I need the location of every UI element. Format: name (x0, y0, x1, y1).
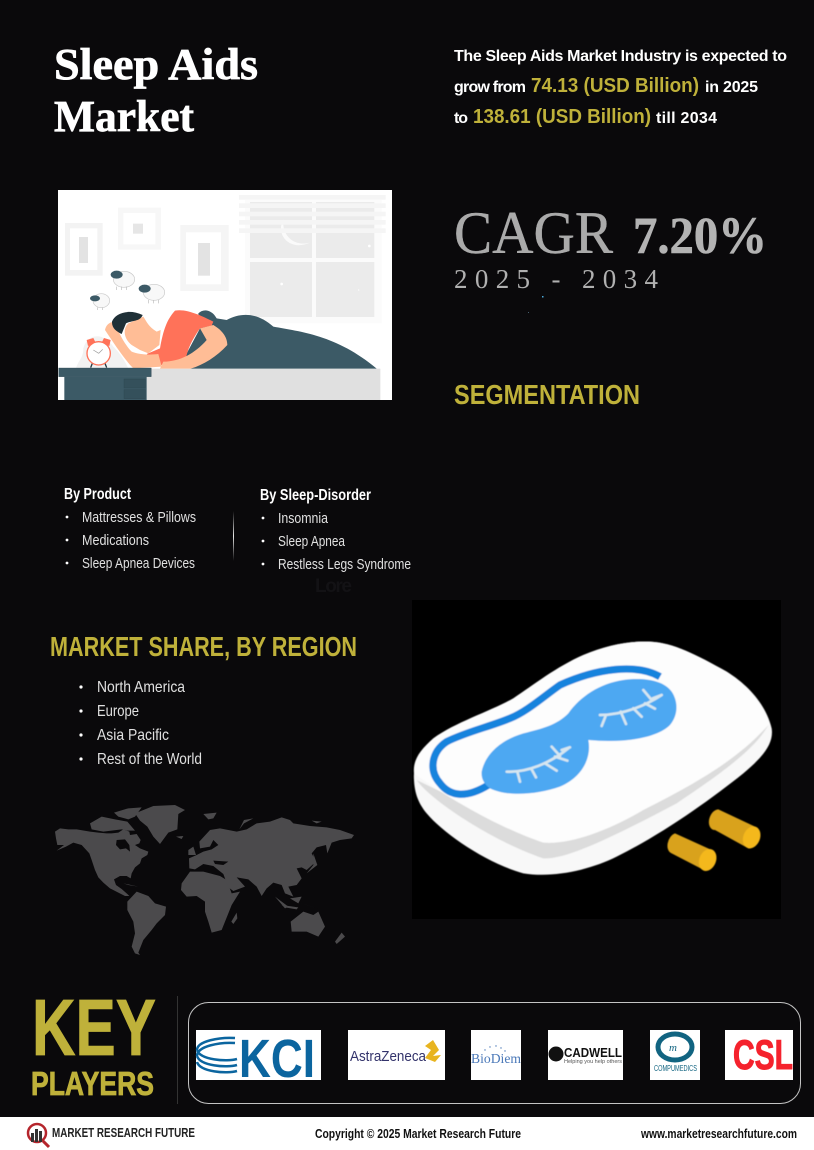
illustration: man sleeping in bed counting sheep (58, 190, 392, 400)
CAGR value: CAGR (454, 200, 613, 266)
key players heading: PLAYERS (31, 1065, 154, 1102)
title (54, 40, 258, 141)
market forecast text: in 2025 (705, 79, 758, 96)
CAGR value (454, 200, 767, 266)
region list (79, 679, 202, 768)
footer logo icon (28, 1124, 49, 1147)
title: Market (54, 92, 194, 141)
segment list: by product: Sleep Apnea Devices (82, 556, 195, 572)
logo: Compumedics: COMPUMEDICS (654, 1064, 697, 1073)
region list: Rest of the World (97, 751, 202, 768)
segmentation heading: SEGMENTATION (454, 379, 640, 410)
market forecast text: 138.61 (USD Billion) (473, 106, 651, 128)
segment list: by product (64, 486, 196, 572)
segment list: by product: By Product (64, 486, 132, 503)
logo: AstraZeneca (348, 1030, 445, 1080)
logo: Cadwell (548, 1030, 623, 1080)
segment list: by sleep disorder: Sleep Apnea (278, 534, 346, 550)
eyelashes (507, 690, 662, 782)
segment list: by sleep disorder: By Sleep-Disorder (260, 487, 371, 504)
segment list: by product: Medications (82, 533, 149, 549)
faint stray text: Lore (315, 576, 352, 597)
region list: Europe (97, 703, 139, 720)
CAGR value: 7.20% (633, 208, 767, 265)
strap (433, 669, 660, 794)
key players panel (188, 1002, 800, 1104)
segment list: by sleep disorder (260, 487, 411, 573)
CAGR period: 2025 - 2034 (454, 264, 658, 294)
picture frames (65, 208, 229, 291)
segment list: by product: Mattresses & Pillows (82, 510, 196, 526)
blanket (185, 310, 377, 369)
logo: KCI (196, 1029, 321, 1089)
logo: Cadwell: CADWELL (564, 1045, 622, 1060)
segment list: by sleep disorder: Restless Legs Syndrome (278, 557, 411, 573)
window with blinds and moon (239, 195, 386, 323)
logo: KCI: KCI (239, 1029, 315, 1089)
market forecast text: grow from (454, 79, 526, 96)
logo: Cadwell: Helping you help others (564, 1059, 623, 1065)
logo: BioDiem (471, 1030, 521, 1080)
region list: North America (97, 679, 185, 696)
market forecast text: 74.13 (USD Billion) (531, 75, 699, 97)
logo: Compumedics (650, 1030, 700, 1080)
sheep (90, 271, 165, 310)
bed (147, 369, 380, 400)
market forecast text: till 2034 (656, 110, 717, 127)
nightstand (59, 368, 151, 400)
torso (147, 310, 213, 365)
mask (482, 679, 676, 794)
footer copyright: Copyright © 2025 Market Research Future (315, 1126, 521, 1141)
world map (55, 805, 354, 955)
footer brand name: MARKET RESEARCH FUTURE (52, 1125, 195, 1140)
logo: CSL (725, 1030, 793, 1080)
logo: AstraZeneca: AstraZeneca (350, 1048, 427, 1065)
segment list: by sleep disorder: Insomnia (278, 511, 329, 527)
arms and neck (160, 325, 227, 369)
key players heading (31, 983, 156, 1102)
market forecast text (454, 48, 787, 128)
hair (112, 312, 143, 334)
market forecast text: to (454, 110, 468, 127)
product image: sleep mask on pillow with ear plugs (412, 600, 781, 919)
alarm clock (87, 338, 111, 368)
market share heading: MARKET SHARE, BY REGION (50, 631, 357, 662)
logo: BioDiem: BioDiem (471, 1052, 521, 1067)
footer (0, 1117, 814, 1150)
logo: Compumedics: m (669, 1042, 677, 1054)
market forecast text: The Sleep Aids Market Industry is expected to (454, 48, 787, 65)
region list: Asia Pacific (97, 727, 169, 744)
ear plugs (667, 809, 764, 874)
title: Sleep Aids (54, 40, 258, 89)
pillow (76, 336, 128, 368)
key players heading: KEY (32, 983, 156, 1072)
pillow (414, 642, 772, 875)
